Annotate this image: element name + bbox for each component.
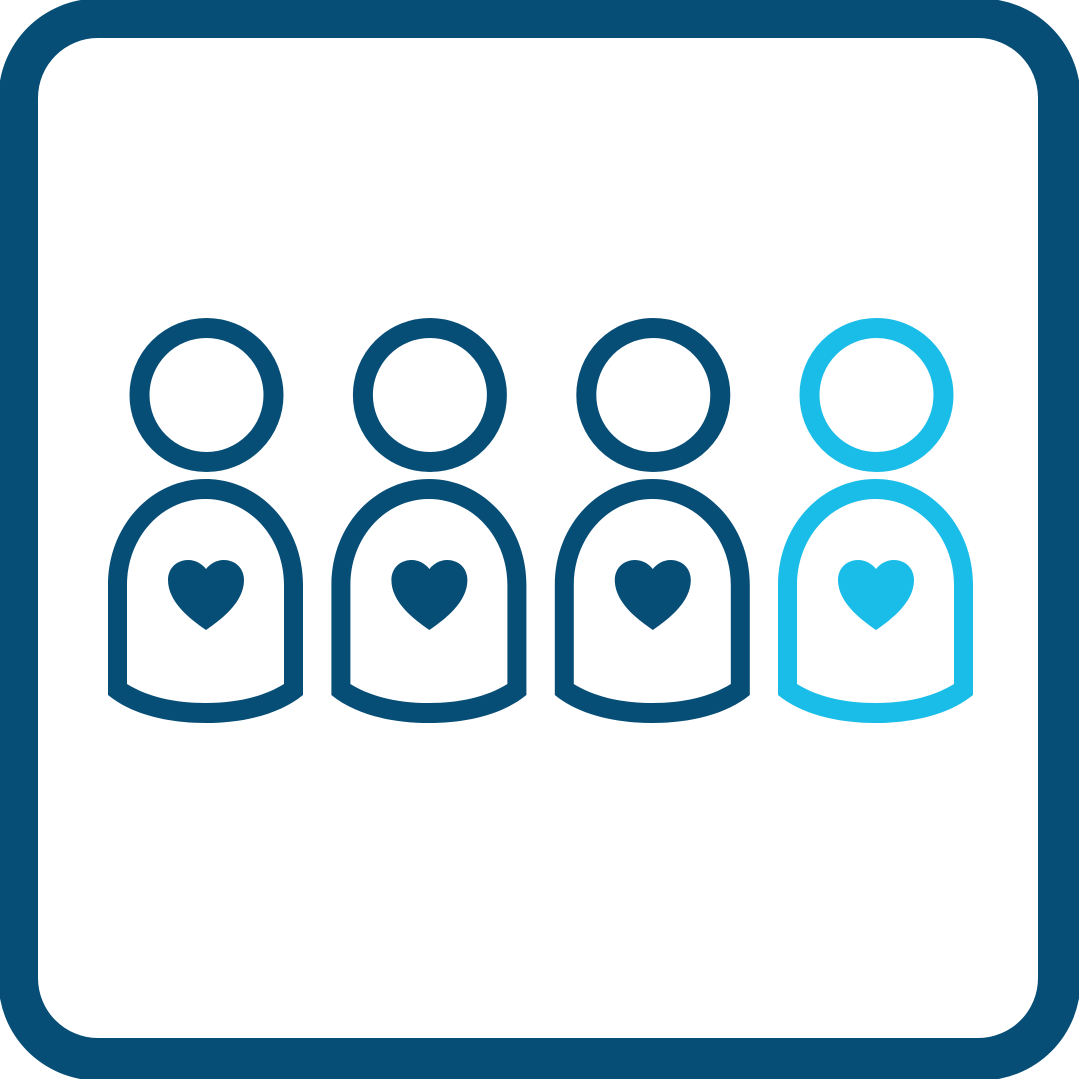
icon: person 2 with heart (331, 328, 526, 723)
icon: person 3 with heart (555, 328, 750, 723)
icon: person 1 with heart (108, 328, 303, 723)
icon: person 4 with heart, highlighted (778, 328, 973, 723)
